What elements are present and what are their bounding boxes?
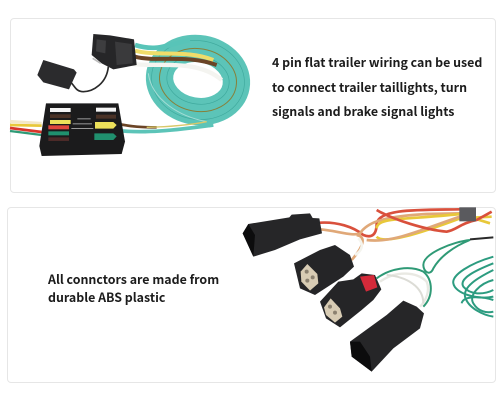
- female connector upper: [294, 245, 354, 295]
- dust cap: [37, 60, 77, 89]
- connector text: [48, 270, 219, 306]
- panel: trailer wiring: [10, 18, 496, 193]
- green and white wires: [377, 237, 493, 307]
- female connector lower: [320, 273, 381, 327]
- trailer wiring text: 4 pin flat trailer wiring can be used: [272, 53, 482, 71]
- left wire bundle: [10, 121, 42, 135]
- trailer wiring text: signals and brake signal lights: [272, 102, 454, 120]
- coiled flat wire: [120, 33, 251, 132]
- connector text: durable ABS plastic: [48, 288, 165, 306]
- photo: 4 pin wiring harness: [10, 33, 251, 156]
- dust cap cord: [68, 67, 108, 92]
- black male connector top: [243, 213, 322, 257]
- control box: [39, 103, 125, 156]
- flat 4 pin connector: [92, 34, 137, 69]
- red, yellow and tan wires: [320, 209, 492, 260]
- wire tie: [459, 207, 476, 221]
- panel: connectors: [7, 207, 496, 383]
- trailer wiring text: to connect trailer taillights, turn: [272, 78, 467, 96]
- trailer wiring text: [272, 53, 482, 120]
- photo: ABS plastic connectors: [243, 207, 493, 372]
- green wire coil: [453, 257, 493, 317]
- black male connector bottom: [350, 301, 424, 372]
- connector text: All connctors are made from: [48, 270, 219, 288]
